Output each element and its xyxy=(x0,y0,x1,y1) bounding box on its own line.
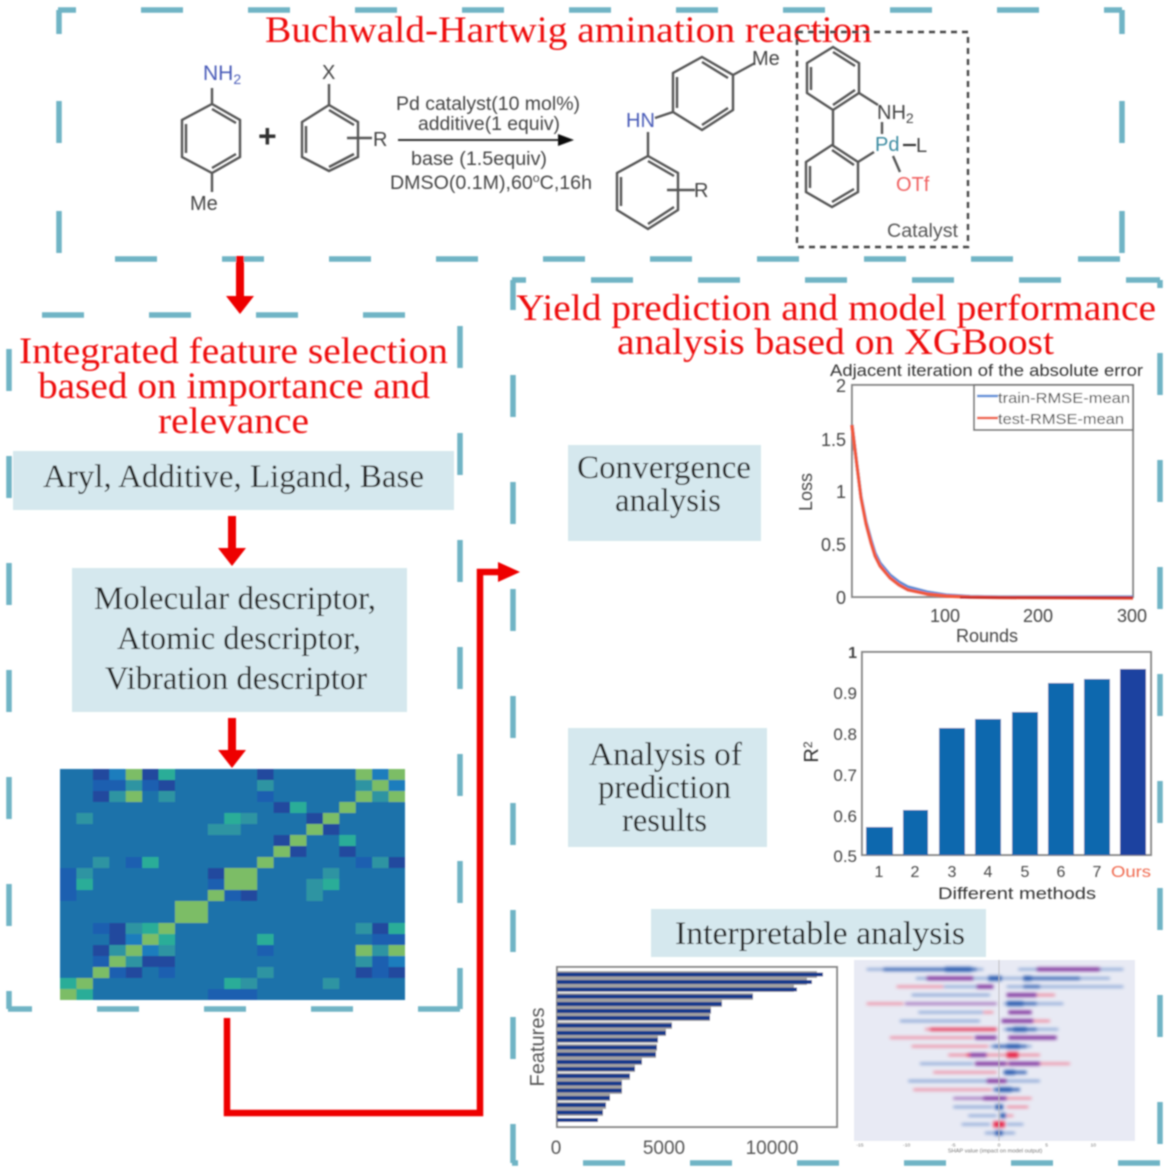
reaction conditions and arrow: DMSO(0.1M),60 xyxy=(390,173,528,194)
chart: SHAP beeswarm plot: -10 xyxy=(903,1143,910,1149)
chart: R2 bar chart: Different methods xyxy=(938,884,1096,903)
heading: integrated feature selection: relevance xyxy=(158,401,309,442)
box: analysis of prediction results xyxy=(568,728,767,847)
chart: feature importance bars: 10000 xyxy=(746,1138,798,1159)
panel: yield prediction dashed frame xyxy=(512,280,1160,1163)
chart: R2 bar chart: 1 xyxy=(875,864,884,881)
box: descriptors xyxy=(72,568,407,712)
molecule: p-toluidine: NH xyxy=(203,62,233,85)
chart: R2 bar chart: 0.6 xyxy=(833,807,857,826)
panel: catalyst structure xyxy=(797,32,968,247)
panel: catalyst structure: Catalyst xyxy=(887,221,959,242)
chart: SHAP beeswarm plot: 0 xyxy=(998,1143,1001,1149)
box: descriptors: Molecular descriptor, xyxy=(94,581,376,617)
arrow: heatmap to yield prediction xyxy=(227,562,520,1113)
chart: feature importance bars: 0 xyxy=(551,1138,561,1159)
chart: SHAP beeswarm plot: -15 xyxy=(856,1143,864,1149)
chart: loss curve xyxy=(796,361,1147,646)
heading: integrated feature selection: based on importance and xyxy=(38,366,431,407)
chart: R2 bar chart: 1 xyxy=(848,645,857,662)
reaction conditions and arrow: C,16h xyxy=(540,173,592,194)
box: analysis of prediction results: results xyxy=(622,803,707,839)
molecule: coupling product: HN xyxy=(626,110,655,132)
arrow: categories to descriptors xyxy=(218,516,246,566)
panel: catalyst structure: OTf xyxy=(896,174,930,196)
chart: loss curve: test-RMSE-mean xyxy=(998,411,1124,428)
panel: reaction scheme dashed frame xyxy=(58,10,1122,259)
chart: feature importance bars: Features xyxy=(527,1008,549,1086)
chart: loss curve: 1.5 xyxy=(821,430,846,450)
chart: loss curve: 100 xyxy=(930,606,960,626)
chart: feature importance bars xyxy=(527,967,837,1159)
box: convergence analysis: analysis xyxy=(615,483,721,519)
molecule: coupling product: R xyxy=(694,180,708,202)
chart: SHAP beeswarm plot: SHAP value (impact on model output) xyxy=(948,1148,1042,1154)
chart: SHAP beeswarm plot xyxy=(854,960,1135,1154)
chart: R2 bar chart: 3 xyxy=(948,864,957,881)
molecule: aryl halide: R xyxy=(373,129,387,151)
chart: R2 bar chart xyxy=(801,645,1151,903)
molecule: coupling product xyxy=(617,48,780,229)
chart: R2 bar chart: 2 xyxy=(911,864,920,881)
chart: R2 bar chart: 0.8 xyxy=(833,725,857,744)
box: convergence analysis xyxy=(568,445,761,541)
chart: correlation heatmap xyxy=(58,768,406,1002)
panel: feature selection dashed frame xyxy=(8,315,460,1009)
chart: R2 bar chart: 6 xyxy=(1057,864,1066,881)
chart: SHAP beeswarm plot: 10 xyxy=(1091,1143,1096,1149)
box: interpretable analysis xyxy=(651,909,986,957)
chart: loss curve: 200 xyxy=(1023,606,1053,626)
chart: loss curve: 300 xyxy=(1117,606,1147,626)
chart: loss curve: Adjacent iteration of the absolute error xyxy=(830,361,1143,380)
box: analysis of prediction results: prediction xyxy=(598,770,731,806)
heading: integrated feature selection xyxy=(19,331,448,442)
chart: R2 bar chart: 0.7 xyxy=(833,766,857,785)
reaction conditions and arrow: o xyxy=(533,171,540,185)
heading: yield prediction: analysis based on XGBoost xyxy=(617,322,1055,363)
panel: catalyst structure: L xyxy=(916,135,927,157)
reaction conditions and arrow: additive(1 equiv) xyxy=(418,114,560,135)
box: descriptors: Atomic descriptor, xyxy=(117,621,361,657)
chart: loss curve: train-RMSE-mean xyxy=(998,390,1130,407)
panel: catalyst structure: 2 xyxy=(906,110,914,126)
chart: SHAP beeswarm plot: -5 xyxy=(951,1143,956,1149)
heading: yield prediction xyxy=(516,288,1156,363)
chart: R2 bar chart: 2 xyxy=(801,741,815,748)
molecule: p-toluidine: 2 xyxy=(233,71,241,87)
arrow: scheme to feature selection xyxy=(226,256,254,314)
chart: R2 bar chart: Ours xyxy=(1111,864,1151,881)
chart: R2 bar chart: 7 xyxy=(1093,864,1102,881)
molecule: p-toluidine: Me xyxy=(190,193,218,215)
chart: loss curve: 1 xyxy=(836,482,846,502)
title: Buchwald-Hartwig amination reaction: Buchwald-Hartwig amination reaction xyxy=(265,10,872,51)
panel: catalyst structure: NH xyxy=(877,102,906,124)
chart: loss curve: Loss xyxy=(796,473,816,511)
chart: R2 bar chart: 4 xyxy=(984,864,993,881)
box: input categories: Aryl, Additive, Ligand, Base xyxy=(43,459,424,495)
molecule: aryl halide: X xyxy=(322,62,335,84)
chart: R2 bar chart: 5 xyxy=(1021,864,1030,881)
chart: R2 bar chart: R xyxy=(801,748,823,763)
plus sign: + xyxy=(258,118,277,154)
box: analysis of prediction results: Analysis of xyxy=(589,737,742,773)
box: input categories xyxy=(13,451,454,510)
heading: yield prediction: Yield prediction and model performance xyxy=(516,288,1156,329)
box: interpretable analysis: Interpretable analysis xyxy=(675,916,965,952)
reaction conditions and arrow: base (1.5equiv) xyxy=(411,149,547,170)
chart: loss curve: 2 xyxy=(836,376,846,396)
molecule: p-toluidine xyxy=(182,62,241,215)
box: convergence analysis: Convergence xyxy=(577,450,751,486)
panel: catalyst structure: Pd xyxy=(875,134,899,156)
chart: loss curve: Rounds xyxy=(956,626,1018,646)
chart: SHAP beeswarm plot: 5 xyxy=(1045,1143,1048,1149)
chart: feature importance bars: 5000 xyxy=(643,1138,685,1159)
chart: loss curve: 0 xyxy=(836,588,846,608)
chart: R2 bar chart: 0.5 xyxy=(833,847,857,866)
box: descriptors: Vibration descriptor xyxy=(105,661,367,697)
reaction conditions and arrow: Pd catalyst(10 mol%) xyxy=(396,94,580,115)
molecule: coupling product: Me xyxy=(752,48,780,70)
chart: loss curve: 0.5 xyxy=(821,535,846,555)
reaction conditions and arrow xyxy=(390,94,592,194)
molecule: aryl halide xyxy=(302,62,387,171)
arrow: descriptors to heatmap xyxy=(218,718,246,768)
chart: R2 bar chart: 0.9 xyxy=(833,684,857,703)
heading: integrated feature selection: Integrated feature selection xyxy=(19,331,448,372)
